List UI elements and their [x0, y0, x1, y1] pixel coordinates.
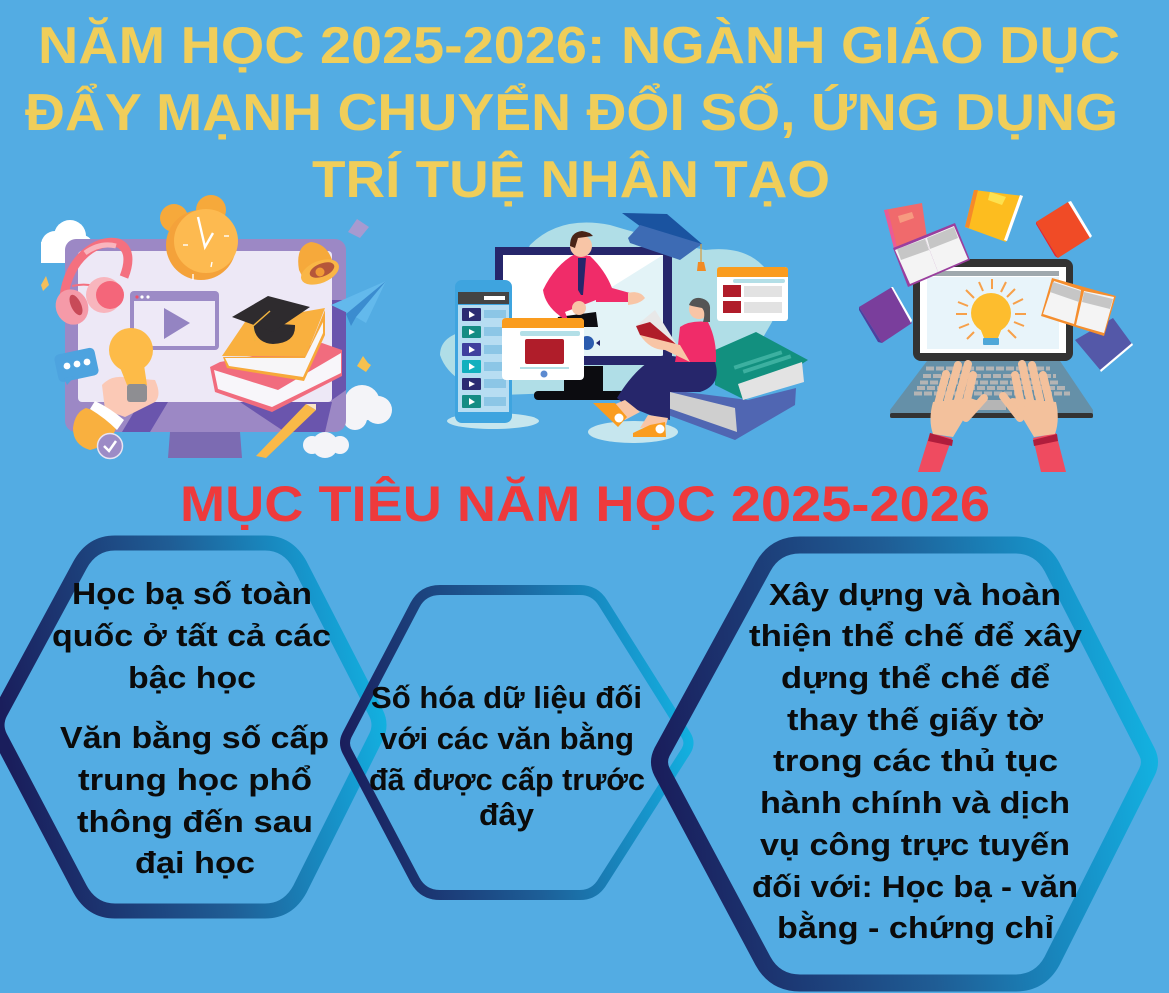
text: digitizing issued diplomas: Số hóa dữ liệu đối [371, 680, 642, 715]
right hand and sleeve [1003, 364, 1066, 472]
text: digitizing issued diplomas [369, 680, 645, 832]
monitor [495, 247, 672, 365]
hexagon outline middle [345, 590, 688, 895]
hand holding lightbulb [73, 328, 158, 458]
student [593, 298, 717, 437]
text: digital diplomas: trung học phổ [78, 762, 312, 797]
monitor frame [65, 239, 346, 432]
text: legal framework: thay thế giấy tờ [787, 702, 1044, 737]
title: TRÍ TUỆ NHÂN TẠO [312, 150, 830, 209]
lightbulb with rays [956, 279, 1026, 345]
mobile phone playlist [455, 280, 512, 423]
article popup [717, 267, 788, 321]
text: legal framework: bằng - chứng chỉ [777, 909, 1054, 945]
clouds bottom right [303, 385, 392, 458]
background blob [440, 222, 777, 395]
flying book red-orange [1036, 201, 1092, 258]
monitor screen [78, 251, 332, 402]
keyboard keys [914, 368, 1070, 394]
text: legal framework: Xây dựng và hoàn [769, 577, 1061, 612]
title: NĂM HỌC 2025-2026: NGÀNH GIÁO DỤC [38, 17, 1120, 75]
section heading: MỤC TIÊU NĂM HỌC 2025-2026 [180, 476, 990, 532]
laptop base [890, 361, 1093, 418]
monitor shadows [122, 300, 346, 432]
hexagon panel: right [660, 545, 1150, 983]
text: digital transcripts: quốc ở tất cả các [52, 618, 331, 653]
text: legal framework: dựng thể chế để [781, 660, 1050, 695]
illustration: online learning monitor with 3D objects [41, 195, 392, 458]
stack of books [668, 332, 808, 440]
hexagon panel: left [0, 543, 379, 911]
text: digital transcripts [52, 576, 331, 695]
text: legal framework: hành chính và dịch [760, 785, 1070, 820]
hexagon outline right [660, 545, 1150, 983]
text: digitizing issued diplomas: đã được cấp trước [369, 762, 645, 797]
graduation cap [622, 213, 706, 271]
pencil [256, 404, 316, 458]
illustration: laptop with lightbulb, books and typing hands [859, 190, 1133, 472]
flying book purple [859, 287, 912, 343]
text: legal framework: đối với: Học bạ - văn [752, 869, 1078, 904]
text: digital diplomas: Văn bằng số cấp [60, 719, 329, 755]
hexagon panel: middle [345, 590, 688, 895]
title [25, 17, 1120, 209]
hexagon outline left [0, 543, 379, 911]
text: digital transcripts: bậc học [128, 660, 256, 695]
small decorations [41, 219, 371, 372]
paper plane [331, 281, 386, 326]
open book purple [893, 223, 970, 287]
ground shadows [447, 413, 678, 443]
text: legal framework: vụ công trực tuyến [760, 827, 1070, 862]
text: legal framework: trong các thủ tục [773, 743, 1058, 778]
video window [130, 291, 219, 350]
cloud top left [41, 220, 93, 263]
title: ĐẨY MẠNH CHUYỂN ĐỔI SỐ, ỨNG DỤNG [25, 83, 1118, 142]
bell [297, 242, 343, 290]
text: digital diplomas: đại học [135, 845, 255, 880]
text: legal framework [749, 577, 1083, 945]
open book orange [1041, 278, 1116, 336]
flying book yellow [965, 190, 1023, 242]
text: digitizing issued diplomas: đây [479, 797, 535, 832]
laptop screen [913, 259, 1073, 361]
headphones [50, 242, 128, 330]
monitor stand [168, 432, 242, 458]
teacher [543, 231, 645, 327]
left hand and sleeve [918, 364, 984, 472]
alarm clock [160, 195, 238, 280]
illustration: online teaching with teacher and student [440, 213, 808, 443]
flying book red-pink [884, 203, 928, 252]
monitor stand [534, 366, 629, 400]
text: legal framework: thiện thể chế để xây [749, 618, 1083, 653]
text: digital diplomas: thông đến sau [77, 804, 313, 839]
text: digital transcripts: Học bạ số toàn [72, 576, 312, 611]
video player popup [502, 318, 584, 380]
flying book indigo [1075, 318, 1133, 372]
chat bubble [54, 347, 99, 385]
text: digitizing issued diplomas: với các văn bằng [380, 720, 634, 756]
text: digital diplomas [60, 719, 329, 880]
books and graduation cap [210, 296, 342, 412]
